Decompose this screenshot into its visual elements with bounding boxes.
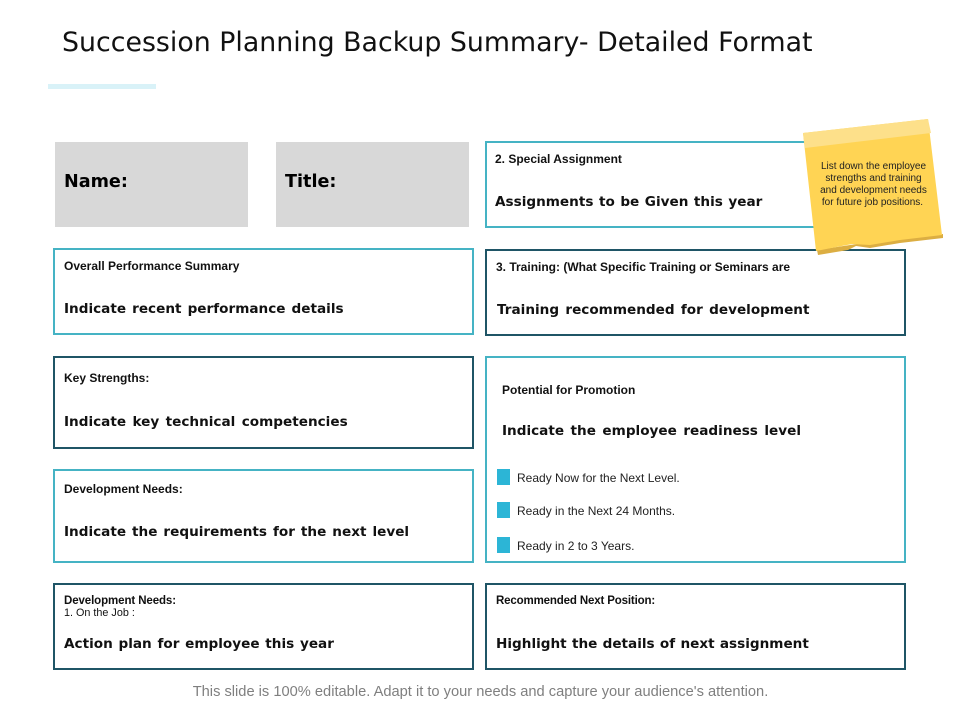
icon: bullet 2: [497, 502, 510, 518]
panel: title field: Title:: [285, 172, 336, 192]
note text: for future job positions.: [822, 197, 923, 208]
text: readiness: Indicate the employee readiness level: [502, 423, 801, 439]
icon: bullet 3: [497, 537, 510, 553]
panel: special assignment: [485, 141, 835, 228]
text: assignments: Assignments to be Given this year: [495, 194, 762, 210]
label: overall performance: Overall Performance Summary: [64, 259, 239, 273]
note text: and development needs: [820, 185, 927, 196]
icon: bullet 1: [497, 469, 510, 485]
title: Succession Planning Backup Summary- Detailed Format: [62, 27, 812, 58]
note body: [803, 119, 942, 251]
label: development needs on the job: 1. On the Job :: [64, 607, 135, 619]
sticky note: [803, 119, 943, 255]
panel: training: [485, 249, 906, 336]
text: competencies: Indicate key technical competencies: [64, 414, 348, 430]
panel: development needs on the job: [53, 583, 474, 670]
panel: development needs: [53, 469, 474, 563]
panel: key strengths: [53, 356, 474, 449]
text: next assignment: Highlight the details of next assignment: [496, 636, 809, 652]
panel: name: [55, 142, 248, 227]
panel: title field: [276, 142, 469, 227]
panel: name: Name:: [64, 172, 128, 192]
text: bullet 3: Ready in 2 to 3 Years.: [517, 539, 634, 553]
text: bullet 1: Ready Now for the Next Level.: [517, 471, 680, 485]
label: key strengths: Key Strengths:: [64, 371, 149, 385]
note tape strip: [803, 119, 931, 148]
label: promotion: Potential for Promotion: [502, 383, 635, 397]
note text: List down the employee: [821, 161, 926, 172]
note text: [820, 161, 927, 208]
text: training recommended: Training recommended for development: [497, 302, 809, 318]
note text: strengths and training: [825, 173, 922, 184]
label: special assignment: 2. Special Assignment: [495, 152, 622, 166]
text: action plan: Action plan for employee this year: [64, 636, 334, 652]
panel: next position: [485, 583, 906, 670]
note curl shadow: [817, 234, 943, 255]
label: development needs: Development Needs:: [64, 482, 183, 496]
label: development needs on the job: Development Needs:: [64, 595, 176, 607]
label: development needs on the job: [64, 595, 176, 619]
label: next position: Recommended Next Position:: [496, 595, 655, 607]
panel: overall performance: [53, 248, 474, 335]
label: training: 3. Training: (What Specific Training or Seminars are: [496, 260, 790, 274]
title accent bar: [48, 84, 156, 89]
text: bullet 2: Ready in the Next 24 Months.: [517, 504, 675, 518]
text: performance details: Indicate recent performance details: [64, 301, 344, 317]
text: requirements: Indicate the requirements for the next level: [64, 524, 409, 540]
footer note: This slide is 100% editable. Adapt it to your needs and capture your audience's attention.: [193, 684, 768, 700]
panel: potential for promotion: [485, 356, 906, 563]
